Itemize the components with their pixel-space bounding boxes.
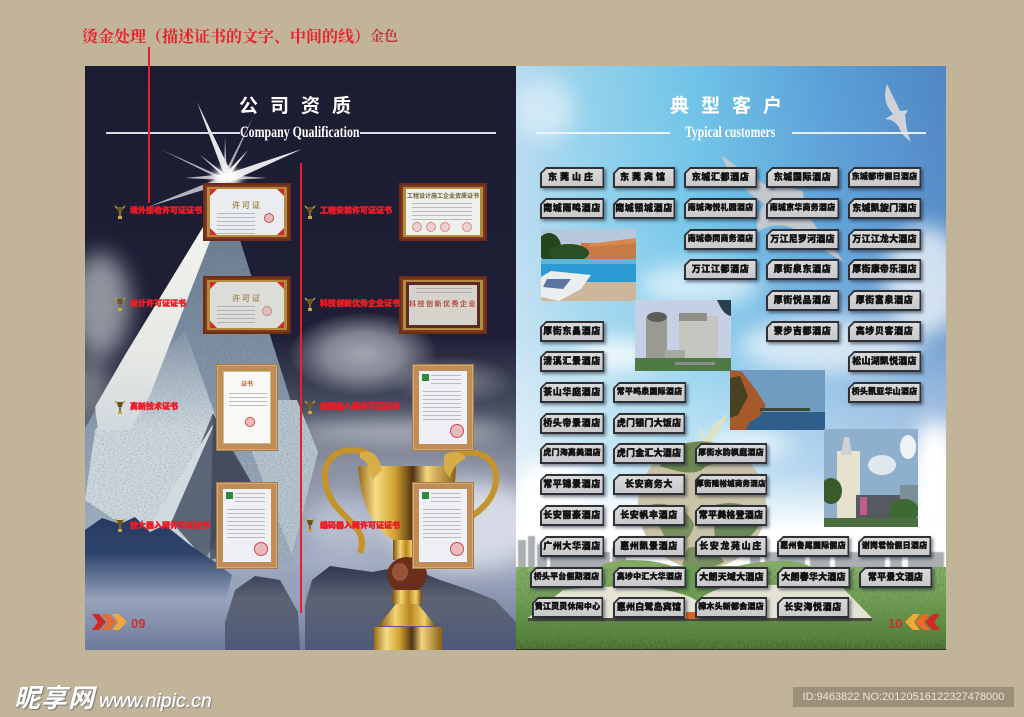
page number 10: 10 bbox=[888, 616, 902, 631]
customer tag: 惠州白鹭岛宾馆 bbox=[617, 602, 681, 612]
customer tag: 长安海悦酒店 bbox=[784, 602, 842, 612]
icon: small trophy bbox=[114, 298, 126, 311]
customer tag: 南城银城酒店 bbox=[615, 203, 673, 213]
photo: resort pool bbox=[541, 229, 636, 301]
customer tag: 桥头帝景酒店 bbox=[543, 418, 601, 428]
certificate: encoder network access bbox=[412, 482, 474, 569]
customer tag: 厚街东昌酒店 bbox=[543, 326, 601, 336]
customer tag: 虎门金汇大酒店 bbox=[617, 448, 681, 458]
image id stamp: ID:9463822 NO:20120516122327478000 bbox=[803, 691, 1004, 703]
sun burst bbox=[148, 102, 302, 207]
label: amplifier network access: 放大器入网许可证证书 bbox=[130, 521, 210, 530]
heading: English subtitle: Company Qualification bbox=[240, 124, 360, 141]
customer tag: 万江江都酒店 bbox=[692, 264, 749, 274]
mountain range: dark blue peaks bbox=[85, 515, 235, 600]
customer tag: 高埗中汇大华酒店 bbox=[617, 572, 682, 581]
certificate: innovation enterprise plaque bbox=[399, 276, 487, 334]
customer tag: 厚街悦品酒店 bbox=[774, 295, 831, 305]
globe bbox=[638, 441, 766, 569]
customer tag: 大朗春华大酒店 bbox=[781, 572, 846, 582]
heading: company qualification: 公司资质 bbox=[239, 96, 363, 117]
customer tag: 常平锦景酒店 bbox=[543, 479, 601, 489]
certificate: amplifier network access bbox=[216, 482, 278, 569]
icon: small trophy bbox=[114, 206, 126, 219]
certificate: overseas reception licence bbox=[203, 183, 291, 241]
open book bbox=[528, 585, 872, 621]
label: high-tech certificate: 高新技术证书 bbox=[130, 402, 178, 411]
grass bbox=[516, 567, 946, 649]
label: engineering installation licence: 工程安装许可证证书 bbox=[320, 206, 392, 215]
skyline bbox=[518, 536, 944, 568]
green hills bbox=[598, 560, 814, 572]
customer tag: 厚街隆裕城商务酒店 bbox=[696, 479, 766, 488]
annotation leader line bbox=[148, 47, 150, 203]
title rule right bbox=[792, 132, 926, 134]
photo: lake shore bbox=[730, 370, 825, 430]
icon: small trophy bbox=[304, 400, 316, 414]
certificate: design licence: 许可证 bbox=[232, 294, 262, 303]
customer tag: 黄江灵灵休闲中心 bbox=[535, 602, 600, 611]
icon: page chevrons left bbox=[92, 614, 127, 630]
certificate: engineering installation licence bbox=[399, 183, 487, 241]
customer tag: 虎门银门大饭店 bbox=[617, 418, 681, 428]
label: innovation enterprise certificate: 科技创新优秀企业证书 bbox=[320, 299, 400, 308]
watermark logo: 昵享网www.nipic.cn bbox=[14, 683, 212, 713]
certificate: high-tech bbox=[216, 364, 278, 451]
customer tag: 南城海悦礼园酒店 bbox=[688, 203, 753, 212]
customer tag: 常平美格登酒店 bbox=[699, 510, 763, 520]
label: encoder network access: 编码器入网许可证证书 bbox=[320, 521, 400, 530]
heading: English subtitle: Typical customers bbox=[685, 124, 775, 141]
customer tag: 桥头凯亚华山酒店 bbox=[852, 387, 917, 396]
customer tag: 万江江龙大酒店 bbox=[852, 234, 917, 244]
customer tag: 万江尼罗河酒店 bbox=[770, 234, 835, 244]
customer tag: 南城京华商务酒店 bbox=[770, 203, 835, 212]
customer tag: 樟木头新都会酒店 bbox=[698, 602, 764, 611]
photo: white tower hotel bbox=[824, 429, 918, 527]
panel: company qualification page bbox=[85, 66, 516, 650]
customer tag: 松山湖凯悦酒店 bbox=[852, 356, 917, 366]
bird: pigeon bbox=[721, 155, 844, 262]
cloud: right of centre line bbox=[288, 312, 438, 396]
page number 09: 09 bbox=[131, 616, 145, 631]
panel: typical customers page bbox=[516, 66, 946, 650]
customer tag: 常平景文酒店 bbox=[868, 572, 923, 582]
icon: page chevrons right bbox=[905, 614, 940, 630]
customer tag: 常平鸣泉国际酒店 bbox=[617, 387, 682, 396]
icon: small trophy bbox=[114, 518, 126, 532]
certificate: high-tech: 证书 bbox=[241, 382, 253, 388]
icon: small trophy bbox=[304, 518, 316, 532]
customer tag: 厚街水韵枫庭酒店 bbox=[698, 448, 764, 457]
customer tag: 厚街康帝乐酒店 bbox=[852, 264, 917, 274]
customer tag: 广州大华酒店 bbox=[543, 541, 601, 551]
customer tag: 大朗天域大酒店 bbox=[699, 572, 764, 582]
title rule right bbox=[360, 132, 496, 134]
cloud: far right band bbox=[390, 356, 516, 406]
customer tag: 长安帆丰酒店 bbox=[620, 510, 678, 520]
certificate: innovation enterprise plaque: 科技创新优秀企业 bbox=[409, 301, 477, 308]
heading: typical customers: 典型客户 bbox=[670, 96, 794, 117]
customer tag: 南城泰同商务酒店 bbox=[688, 234, 753, 243]
image id stamp bbox=[793, 687, 1014, 707]
title rule left bbox=[106, 132, 240, 134]
bird: seagull bbox=[885, 84, 911, 142]
certificate: design licence bbox=[203, 276, 291, 334]
customer tag: 厚街富泉酒店 bbox=[856, 295, 913, 305]
certificate: engineering installation licence: 工程设计施工企业资质证书 bbox=[407, 194, 479, 200]
customer tag: 长安龙苑山庄 bbox=[699, 541, 763, 551]
icon: small trophy bbox=[114, 400, 126, 414]
customer tag: 长安商务大 bbox=[625, 479, 673, 489]
annotation: gold foil note: 金色 bbox=[370, 30, 398, 45]
customer tag: 东城汇都酒店 bbox=[692, 172, 749, 182]
customer tag: 寮步吉都酒店 bbox=[774, 326, 831, 336]
customer tag: 厚街泉东酒店 bbox=[774, 264, 831, 274]
customer tag: 谢岗君怡假日酒店 bbox=[862, 541, 927, 550]
customer tag: 东莞山庄 bbox=[548, 172, 596, 182]
centre gold line bbox=[300, 163, 302, 613]
label: overseas reception licence: 境外接收许可证证书 bbox=[130, 206, 202, 215]
customer tag: 南城雨鸣酒店 bbox=[543, 203, 601, 213]
customer tag: 桥头平台假期酒店 bbox=[534, 572, 599, 581]
customer tag: 东莞宾馆 bbox=[620, 172, 668, 182]
customer tag: 高埗贝客酒店 bbox=[856, 326, 913, 336]
customer tag: 虎门海高美酒店 bbox=[543, 448, 601, 457]
customer tag: 清溪汇景酒店 bbox=[543, 356, 601, 366]
icon: small trophy bbox=[304, 298, 316, 311]
icon: small trophy bbox=[304, 206, 316, 219]
customer tag: 东城都市假日酒店 bbox=[852, 172, 917, 181]
customer tag: 茶山华庭酒店 bbox=[543, 387, 601, 397]
customer tag: 东城国际酒店 bbox=[774, 172, 831, 182]
pyramid body bbox=[85, 227, 311, 565]
customer tag: 惠州鲁尾国际假店 bbox=[780, 541, 846, 550]
certificate: modulator network access bbox=[412, 364, 474, 451]
title rule left bbox=[536, 132, 670, 134]
label: design licence: 设计许可证证书 bbox=[130, 299, 186, 308]
label: modulator network access: 调制器入网许可证证书 bbox=[320, 402, 400, 411]
annotation: gold foil note: 烫金处理（描述证书的文字、中间的线） bbox=[82, 29, 370, 46]
seedling bbox=[690, 414, 728, 450]
photo: twin hotel towers bbox=[635, 300, 731, 371]
customer tag: 东城凯旋门酒店 bbox=[852, 203, 917, 213]
certificate: overseas reception licence: 许可证 bbox=[232, 201, 262, 210]
customer tag: 长安丽豪酒店 bbox=[543, 510, 601, 520]
customer tag: 惠州凯景酒店 bbox=[620, 541, 678, 551]
